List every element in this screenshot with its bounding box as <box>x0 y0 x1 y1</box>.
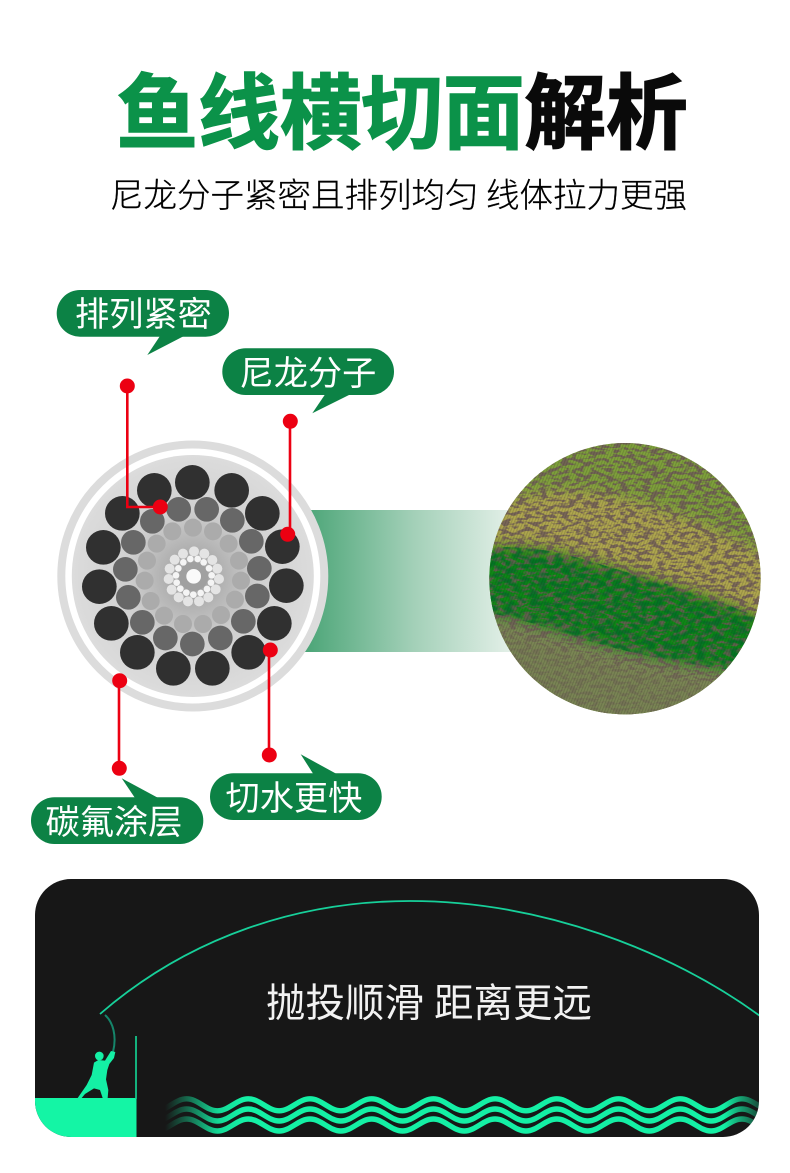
dark flecks <box>487 442 763 718</box>
callout: 排列紧密 <box>57 290 229 355</box>
banner text: 抛投顺滑 <box>266 982 424 1026</box>
callout: 尼龙分子: 尼龙分子 <box>240 355 376 393</box>
callout: 切水更快: 切水更快 <box>226 780 362 818</box>
nylon molecule circles <box>82 465 304 686</box>
red pointer: 尼龙分子 <box>280 414 298 542</box>
title: 鱼线横切面解析 <box>116 69 688 160</box>
red pointer: 排列紧密 <box>120 378 168 514</box>
callout: 切水更快 <box>210 754 382 820</box>
green gradient connector band <box>290 510 515 652</box>
callout: 尼龙分子 <box>222 348 394 413</box>
icon: angler silhouette <box>78 1051 115 1098</box>
banner text: 距离更远 <box>434 982 592 1026</box>
subtitle: 尼龙分子紧密且排列均匀 <box>110 178 478 215</box>
outer coating ring <box>61 444 324 708</box>
inner disc <box>72 455 314 697</box>
callout: 碳氟涂层 <box>31 778 203 844</box>
fishing line cross-section diagram <box>61 444 324 708</box>
magnified line surface photo <box>489 443 761 714</box>
red pointer: 切水更快 <box>262 642 278 762</box>
callout: 碳氟涂层: 碳氟涂层 <box>46 804 182 842</box>
red pointer: 碳氟涂层 <box>112 673 127 776</box>
fishing rod <box>105 1015 115 1052</box>
shore post <box>135 1036 137 1099</box>
casting arc line <box>100 901 760 1016</box>
waves <box>125 1099 790 1131</box>
deep green shadow flecks <box>489 547 756 670</box>
callout: 排列紧密: 排列紧密 <box>75 296 212 334</box>
shore block <box>35 1098 136 1138</box>
subtitle: 线体拉力更强 <box>486 178 687 215</box>
panel: casting banner <box>35 879 790 1138</box>
